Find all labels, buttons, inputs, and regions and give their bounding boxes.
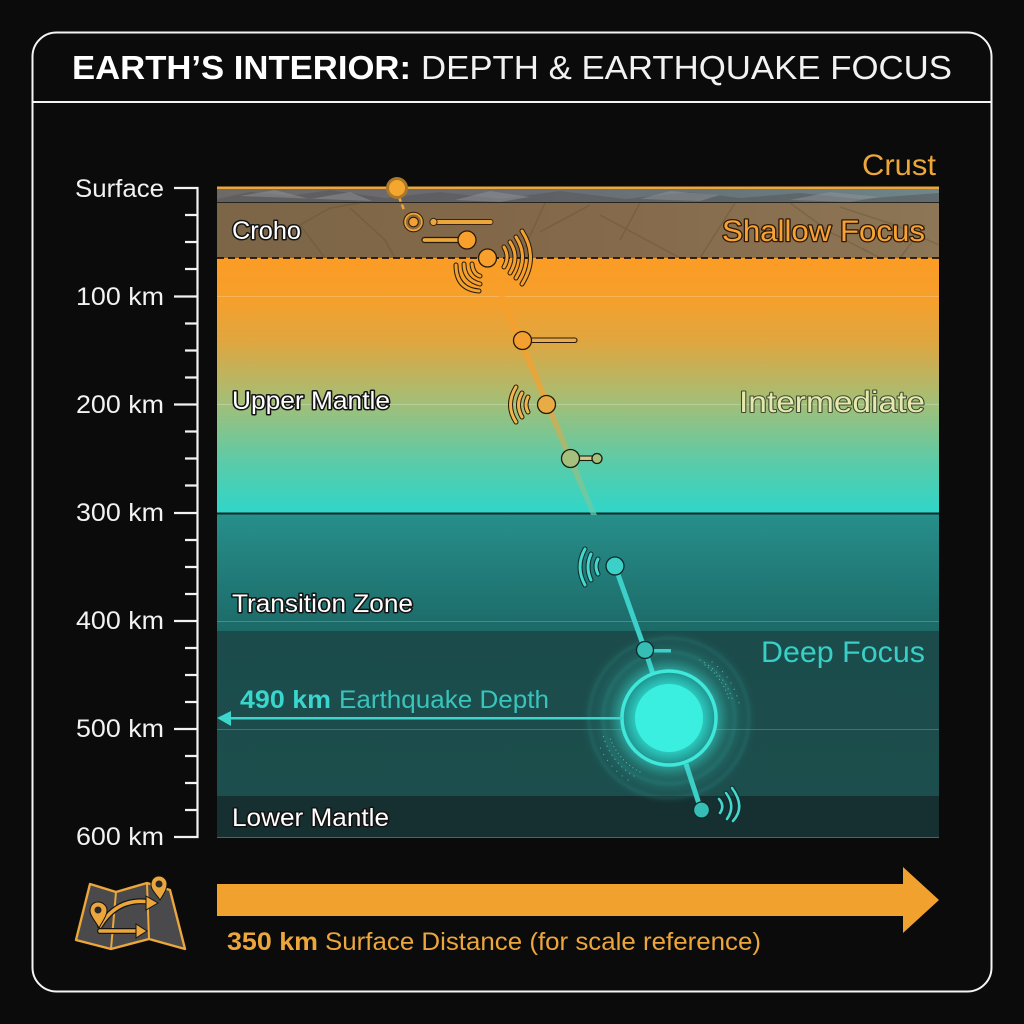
zone label: deep focus: Deep Focus bbox=[761, 636, 925, 669]
icon: seismic waves bbox=[510, 387, 528, 422]
depth label: 490 km: 490 km bbox=[240, 686, 331, 714]
layer: shallow focus band bbox=[217, 203, 939, 258]
icon: map with route bbox=[76, 876, 185, 949]
surface distance arrow bbox=[217, 867, 939, 933]
layer labels: Lower Mantle bbox=[232, 804, 389, 832]
scale labels: Surface bbox=[75, 175, 164, 203]
icon: seismic waves bbox=[719, 788, 739, 821]
zone label: crust: Crust bbox=[862, 149, 937, 182]
layer: deep zone bbox=[217, 631, 939, 796]
scale labels: 300 km bbox=[76, 499, 164, 527]
route arrows bbox=[100, 901, 150, 931]
layer labels: Transition Zone bbox=[232, 590, 413, 618]
title bar divider bbox=[33, 101, 991, 103]
scale labels bbox=[75, 175, 164, 851]
300 km boundary line bbox=[217, 512, 939, 514]
earthquake trajectory: deep bbox=[615, 566, 701, 810]
scale labels: 500 km bbox=[76, 715, 164, 743]
scale labels: 400 km bbox=[76, 607, 164, 635]
focus: 140 km marker bbox=[514, 332, 577, 350]
icon: seismic waves right bbox=[504, 231, 530, 284]
icon: seismic waves bbox=[580, 549, 598, 585]
scale labels: 600 km bbox=[76, 823, 164, 851]
focus: ring node bbox=[404, 212, 423, 232]
surface distance label: Surface Distance (for scale reference) bbox=[325, 928, 761, 956]
depth scale bbox=[75, 175, 198, 851]
title bbox=[72, 49, 952, 86]
earthquake trajectory: shallow to 300 km bbox=[399, 197, 597, 515]
layer: lower mantle bbox=[217, 796, 939, 838]
scale labels: 100 km bbox=[76, 283, 164, 311]
title: EARTH’S INTERIOR: bbox=[72, 49, 411, 86]
layer: upper mantle gradient bbox=[217, 258, 939, 513]
focus: 250 km marker bbox=[562, 450, 602, 468]
focus: tail marker bbox=[422, 231, 476, 249]
focus: 350 km marker with waves bbox=[580, 549, 624, 585]
focus glow: main earthquake focus bbox=[581, 630, 757, 806]
focus: 430 km marker bbox=[636, 642, 671, 658]
layer labels: Upper Mantle bbox=[232, 387, 390, 415]
depth arrow: 490 km bbox=[217, 711, 622, 726]
focus: node with waves at moho bbox=[456, 231, 530, 291]
focus: 200 km marker with waves bbox=[510, 387, 556, 422]
layer labels bbox=[232, 217, 413, 832]
layer: crust surface rock bbox=[217, 186, 939, 204]
icon: seismic waves left bbox=[456, 264, 480, 291]
layer: transition zone bbox=[217, 514, 939, 631]
focus: 570 km marker with waves bbox=[694, 788, 739, 821]
surface distance label: 350 km bbox=[227, 928, 318, 956]
map pins bbox=[90, 902, 107, 928]
depth label: 490 km: Earthquake Depth bbox=[339, 686, 549, 714]
zone label: shallow focus: Shallow Focus bbox=[722, 215, 925, 248]
zone label: intermediate: Intermediate bbox=[739, 386, 925, 419]
focus: small tail marker bbox=[430, 218, 493, 226]
layer labels: Croho bbox=[232, 217, 301, 245]
scale labels: 200 km bbox=[76, 391, 164, 419]
focus: surface epicentre bbox=[386, 177, 408, 199]
title: DEPTH & EARTHQUAKE FOCUS bbox=[421, 49, 952, 86]
depth grid lines bbox=[217, 296, 939, 838]
moho dashed boundary bbox=[217, 257, 939, 259]
depth label: 490 km bbox=[240, 686, 549, 714]
